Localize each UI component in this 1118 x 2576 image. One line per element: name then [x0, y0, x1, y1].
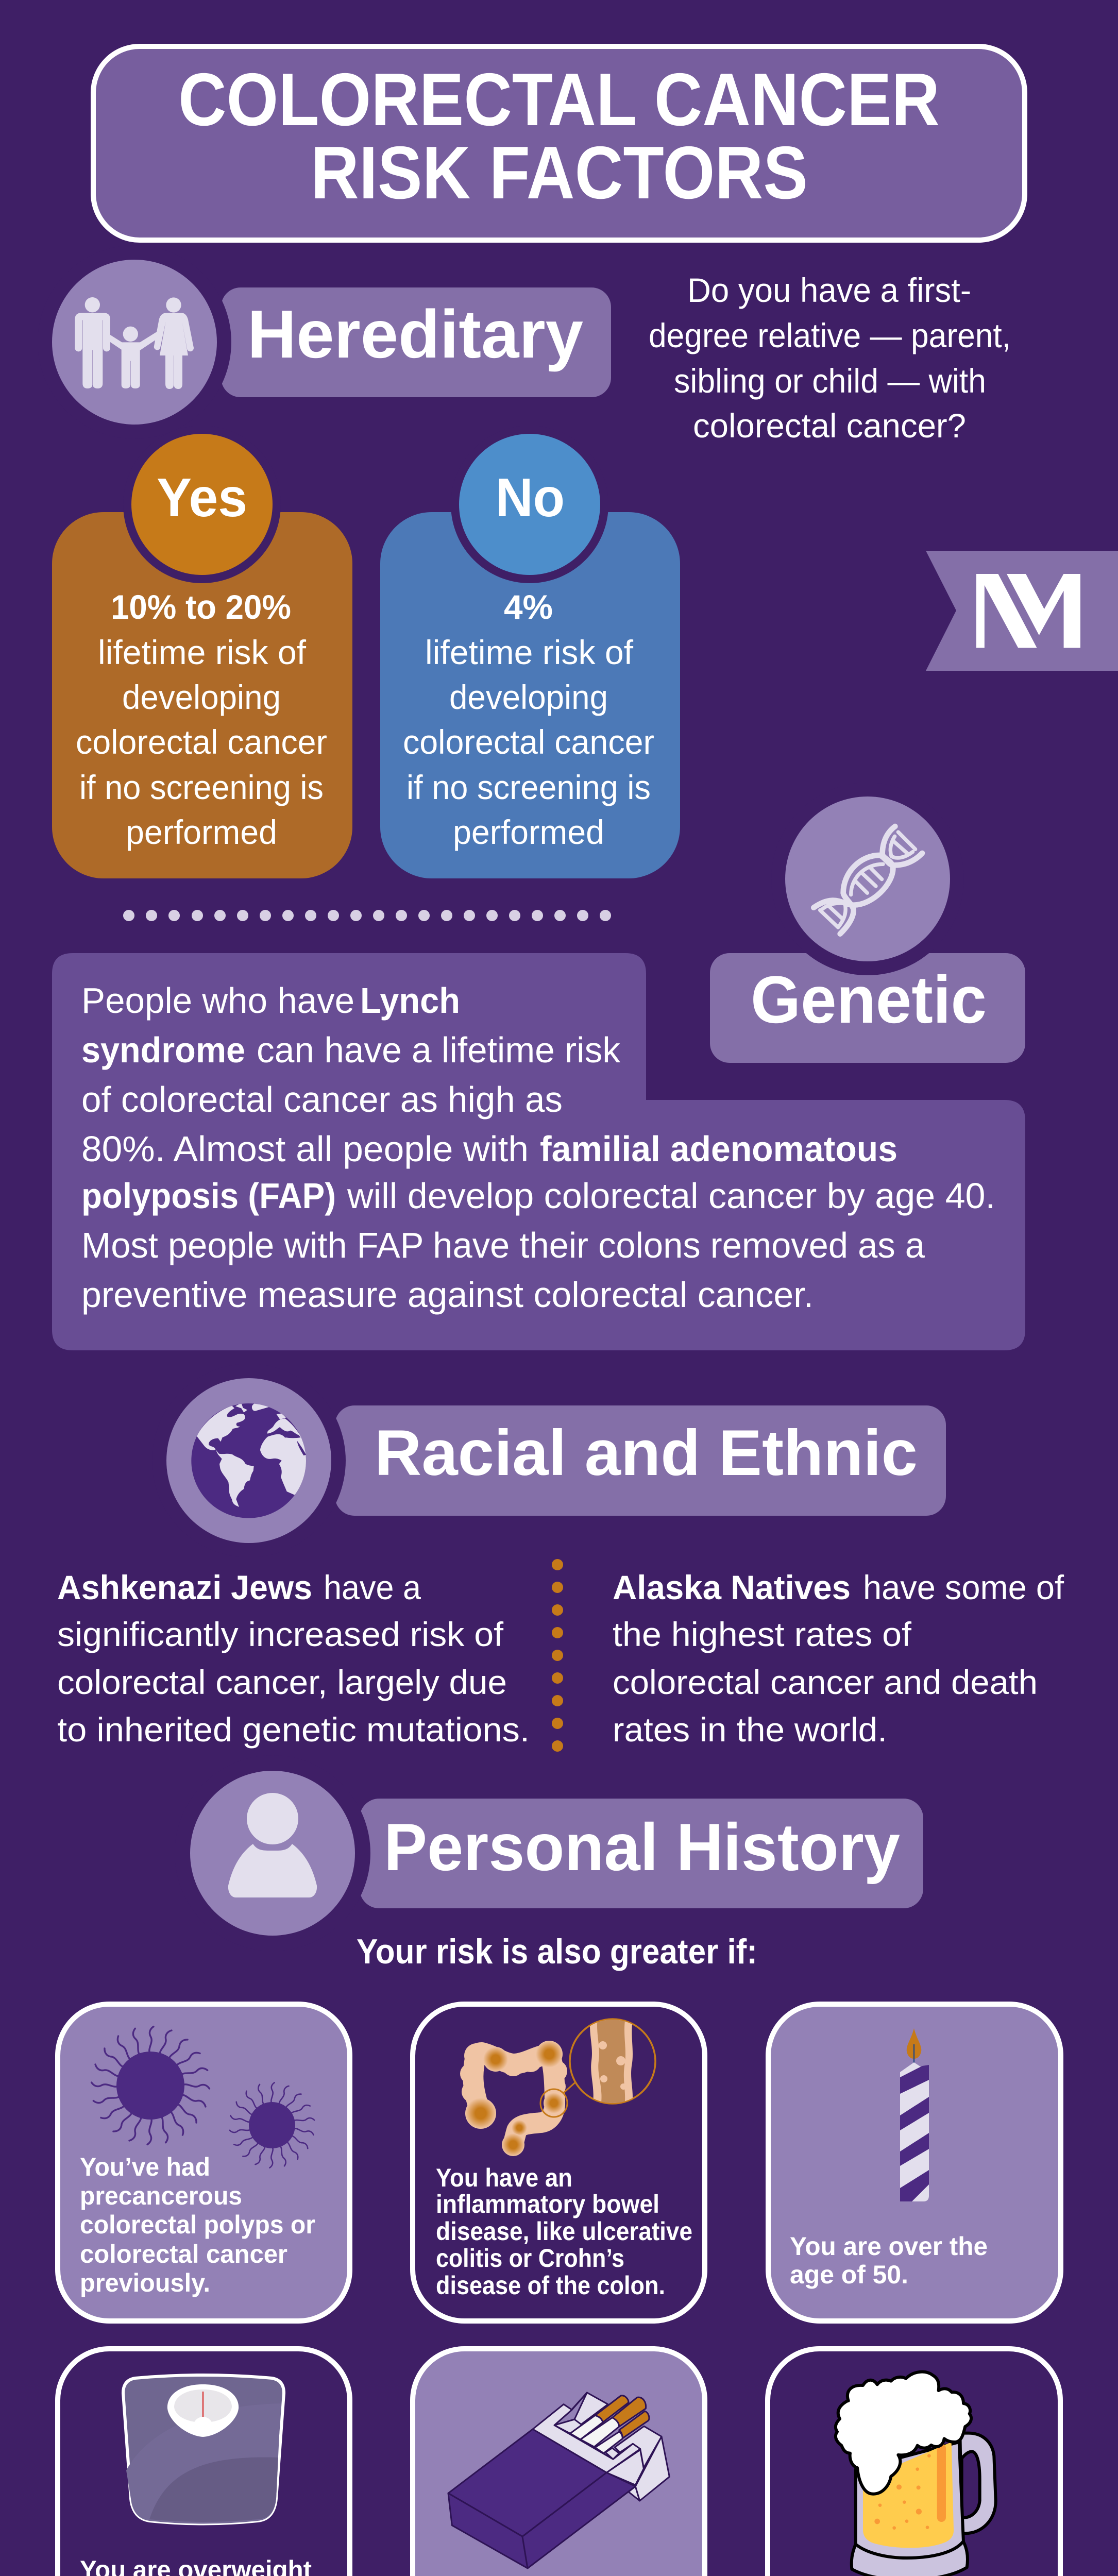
icon: cigarette pack	[448, 2393, 669, 2568]
icon: globe	[166, 1378, 331, 1543]
card: yes: colorectal cancer	[76, 723, 327, 761]
card: inflammatory bowel disease: You have an	[436, 2163, 572, 2192]
section: personal history	[58, 1755, 1061, 2576]
question text: sibling or child — with	[674, 362, 986, 400]
title: RISK FACTORS	[311, 131, 808, 214]
panel: genetic text: Most people with FAP have their colons removed as a	[81, 1225, 925, 1265]
flag: NM logo	[926, 551, 1118, 671]
text: Ashkenazi Jews: to inherited genetic mutations.	[57, 1710, 530, 1749]
card: no	[380, 426, 680, 878]
card: drink	[768, 2349, 1060, 2576]
card: smoke	[413, 2349, 705, 2576]
text: Ashkenazi Jews: colorectal cancer, largely due	[57, 1663, 507, 1701]
card: polyps: previously.	[80, 2268, 210, 2297]
panel: genetic text: preventive measure against colorectal cancer.	[81, 1275, 814, 1315]
text: Ashkenazi Jews: significantly increased risk of	[57, 1615, 504, 1653]
card: over age 50: age of 50.	[790, 2260, 908, 2289]
card: no: lifetime risk of	[425, 633, 634, 671]
card: polyps: precancerous	[80, 2181, 242, 2210]
icon: polyps	[92, 2027, 314, 2168]
text: Alaska Natives: colorectal cancer and death	[613, 1663, 1038, 1701]
text: Alaska Natives: have some of	[863, 1568, 1064, 1606]
card: yes: 10% to 20%	[111, 588, 291, 626]
card: over age 50: You are over the	[790, 2232, 988, 2261]
text: Ashkenazi Jews: have a	[324, 1568, 421, 1606]
dotted vertical divider	[552, 1559, 563, 1752]
card: yes: developing	[122, 678, 281, 716]
card: inflammatory bowel disease: disease of the colon.	[436, 2271, 665, 2300]
card: yes: if no screening is	[79, 768, 324, 806]
subheading: Your risk is also greater if:	[357, 1932, 757, 1971]
text: Alaska Natives: rates in the world.	[613, 1710, 887, 1749]
question text: colorectal cancer?	[693, 406, 966, 445]
panel: genetic text: familial adenomatous	[540, 1129, 897, 1169]
card: inflammatory bowel disease: disease, like ulcerative	[436, 2217, 692, 2246]
card: overweight	[58, 2349, 350, 2576]
title	[93, 46, 1025, 240]
panel: genetic text: of colorectal cancer as high as	[81, 1079, 563, 1120]
card: polyps: colorectal polyps or	[80, 2210, 315, 2239]
card: polyps: You’ve had	[80, 2153, 210, 2181]
heading tag: personal history	[175, 1755, 923, 1951]
text: Alaska Natives: Alaska Natives	[613, 1568, 851, 1606]
heading tag: personal history: Personal History	[384, 1809, 900, 1885]
panel: genetic text: can have a lifetime risk	[257, 1030, 621, 1070]
card: no: colorectal cancer	[403, 723, 654, 761]
card: yes: lifetime risk of	[98, 633, 307, 671]
card: polyps	[58, 2004, 350, 2321]
icon: colon	[460, 2017, 655, 2156]
card: inflammatory bowel disease: inflammatory bowel	[436, 2190, 659, 2218]
card: no: if no screening is	[406, 768, 651, 806]
title: COLORECTAL CANCER	[178, 58, 940, 141]
heading tag: genetic	[710, 783, 1025, 1063]
card: polyps: colorectal cancer	[80, 2240, 287, 2268]
icon: family	[52, 260, 217, 425]
card: no: developing	[449, 678, 608, 716]
heading tag: racial and ethnic	[152, 1364, 946, 1557]
section: genetic	[52, 783, 1025, 1350]
icon: DNA	[785, 796, 950, 961]
panel: genetic text: will develop colorectal cancer by age 40.	[347, 1176, 995, 1216]
heading tag: hereditary	[38, 245, 611, 439]
text: Ashkenazi Jews	[57, 1568, 530, 1749]
icon: person	[190, 1771, 355, 1936]
icon: scale	[123, 2375, 284, 2523]
text: Ashkenazi Jews: Ashkenazi Jews	[57, 1568, 312, 1606]
dotted divider	[123, 910, 611, 921]
panel: genetic text: People who have	[81, 980, 354, 1021]
panel: genetic text: 80%. Almost all people with	[81, 1129, 529, 1169]
card: no: performed	[453, 813, 604, 851]
card: inflammatory bowel disease	[413, 2004, 705, 2321]
heading tag: genetic: Genetic	[751, 962, 987, 1037]
heading tag: hereditary: Hereditary	[247, 296, 583, 372]
card: over age 50	[768, 2004, 1061, 2321]
question text	[649, 271, 1011, 445]
panel: genetic text: Lynch	[360, 980, 460, 1021]
heading tag: racial and ethnic: Racial and Ethnic	[375, 1417, 918, 1489]
card: no: 4%	[504, 588, 553, 626]
question text: degree relative — parent,	[649, 316, 1011, 354]
panel: genetic text: polyposis (FAP)	[81, 1176, 336, 1216]
card: inflammatory bowel disease: colitis or Crohn’s	[436, 2244, 624, 2273]
card: no: No	[496, 467, 565, 528]
card: yes: Yes	[157, 467, 247, 528]
panel: genetic text	[52, 953, 1025, 1350]
question text: Do you have a first-	[687, 271, 971, 309]
icon: beer mug	[836, 2372, 996, 2576]
icon: candle	[900, 2028, 929, 2201]
section: hereditary	[38, 245, 1011, 878]
text: Alaska Natives	[613, 1568, 1064, 1749]
text: Alaska Natives: the highest rates of	[613, 1615, 912, 1653]
section: racial and ethnic	[57, 1364, 1064, 1752]
card: yes	[52, 426, 352, 878]
card: yes: performed	[126, 813, 277, 851]
panel: genetic text: syndrome	[81, 1030, 245, 1070]
